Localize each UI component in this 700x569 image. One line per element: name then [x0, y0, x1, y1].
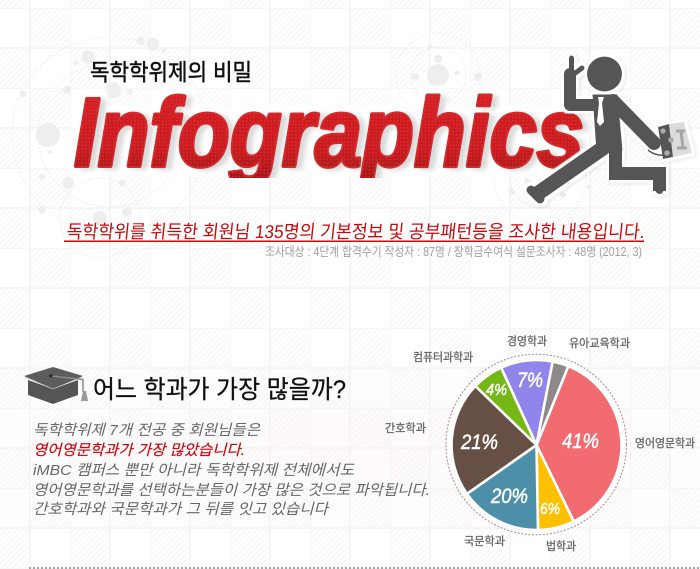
icon: running businessman with briefcase: [531, 56, 692, 199]
pie labels: 유아교육학과: [569, 337, 630, 350]
percentage labels: [460, 369, 599, 518]
pie labels: 간호학과: [385, 422, 426, 435]
icon: graduation cap: [24, 367, 88, 404]
slice: 간호학과 21%: [452, 386, 536, 494]
dotted bottom divider: [29, 567, 700, 569]
head: [587, 56, 622, 92]
percentage labels: 21%: [460, 431, 498, 454]
pie labels: 경영학과: [507, 334, 547, 348]
text block: description: 간호학과와 국문학과가 그 뒤를 잇고 있습니다: [33, 501, 330, 518]
survey note: 조사대상 : 4단계 합격수기 작성자 : 87명 / 장학금수여식 설문조사자 : 48명 (2012, 3): [265, 245, 642, 259]
briefcase handle: [648, 150, 664, 155]
pie labels: 국문학과: [464, 535, 505, 548]
decorative network circles: [12, 33, 591, 258]
text block: description: 독학학위제 7개 전공 중 회원님들은: [33, 422, 261, 439]
heading: question: 어느 학과가 가장 많을까?: [93, 376, 346, 404]
body and limbs: [531, 58, 660, 199]
pie labels: 영어영문학과: [635, 437, 695, 450]
title: Infographics: Infographics: [74, 78, 584, 187]
slice: 국문학과 20%: [467, 445, 538, 530]
slice: 컴퓨터과학과 4%: [475, 368, 536, 445]
text block: description: iMBC 캠퍼스 뿐만 아니라 독학학위제 전체에서도: [33, 462, 355, 479]
percentage labels: 4%: [486, 382, 507, 399]
percentage labels: 6%: [540, 501, 560, 518]
text block: description: [33, 422, 430, 518]
slice: 영어영문학과 41%: [536, 366, 621, 521]
pie chart: departments: [446, 354, 626, 535]
pie labels: [385, 334, 695, 553]
percentage labels: 20%: [490, 485, 528, 508]
text block: description: 영어영문학과를 선택하는분들이 가장 많은 것으로 파악됩니다.: [33, 482, 430, 499]
percentage labels: 41%: [562, 430, 599, 453]
subtitle: 독학학위를 취득한 회원님 135명의 기본정보 및 공부패턴등을 조사한 내용입니다.: [66, 221, 646, 242]
pie labels: 컴퓨터과학과: [413, 351, 473, 364]
text block: description: 영어영문학과가 가장 많았습니다.: [33, 442, 245, 459]
title: 독학학위제의 비밀: 독학학위제의 비밀: [90, 59, 252, 85]
slice: 경영학과 7%: [501, 360, 553, 445]
briefcase: [658, 122, 692, 159]
slice: 유아교육학과: [536, 362, 568, 445]
pie labels: 법학과: [546, 540, 576, 553]
percentage labels: 7%: [517, 369, 543, 392]
tie: [597, 97, 604, 126]
slice: 법학과 6%: [536, 445, 574, 530]
